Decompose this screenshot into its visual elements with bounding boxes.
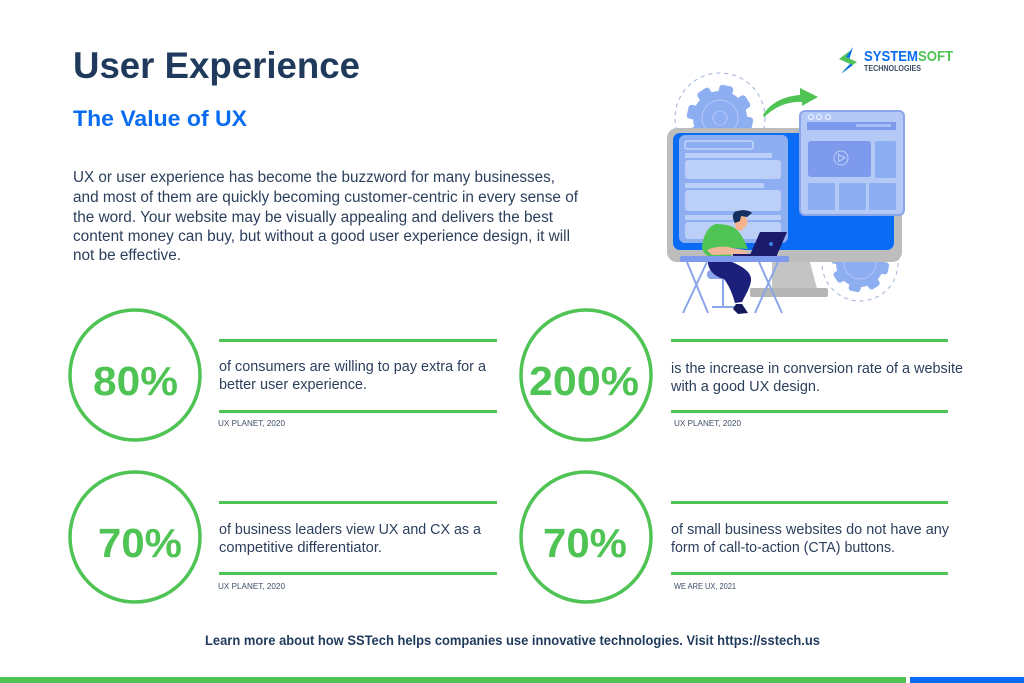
stat: 80% [70, 310, 497, 440]
arm [707, 247, 748, 255]
hair [733, 210, 752, 223]
source: UX PLANET, 2020 [218, 581, 285, 591]
intro paragraph: the word. Your website may be visually appealing and delivers the best [73, 209, 554, 226]
footer call to action: Learn more about how SSTech helps companies use innovative technologies. Visit https://sstech.us [205, 633, 820, 648]
icon: lower gear [822, 225, 898, 301]
intro paragraph: UX or user experience has become the buzzword for many businesses, [73, 169, 555, 186]
stool [707, 270, 735, 307]
title: User Experience [73, 44, 360, 86]
stat: 70% business leaders [70, 472, 497, 602]
logo wordmark: SYSTEMSOFT [864, 48, 953, 65]
torso [702, 224, 748, 256]
stat text [219, 359, 487, 393]
person with laptop at desk [680, 210, 789, 314]
subtitle: The Value of UX [73, 106, 247, 131]
top rule [219, 339, 497, 342]
stat number: 70% [98, 520, 182, 566]
source: UX PLANET, 2020 [218, 418, 285, 428]
bottom rule [671, 410, 948, 413]
legs [708, 262, 751, 303]
stat text: competitive differentiator. [219, 540, 382, 556]
bottom rule [219, 410, 497, 413]
arrow: green curved arrow [763, 88, 818, 117]
logo: SystemSoft Technologies [839, 47, 953, 74]
stat: 70% small business [521, 472, 950, 602]
stat number: 70% [543, 520, 627, 566]
stat text [671, 522, 950, 556]
monitor [667, 128, 902, 262]
laptop [750, 232, 787, 255]
footer bar: blue [910, 677, 1024, 683]
stat: 200% [521, 310, 963, 440]
intro paragraph: not be effective. [73, 247, 181, 264]
desk legs [683, 262, 782, 313]
source: WE ARE UX, 2021 [674, 581, 736, 591]
illustration: user at desk in front of monitor [667, 73, 904, 314]
source: UX PLANET, 2020 [674, 418, 741, 428]
stat number: 80% [93, 358, 178, 404]
head [734, 216, 748, 228]
stat circle [70, 472, 200, 602]
stat text: form of call-to-action (CTA) buttons. [671, 540, 895, 556]
stat text: better user experience. [219, 377, 367, 393]
intro paragraph [73, 169, 579, 264]
logo tagline: TECHNOLOGIES [864, 64, 922, 73]
icon: upper gear [675, 73, 765, 163]
stat text: of small business websites do not have any [671, 522, 950, 538]
stat circle [521, 472, 651, 602]
stat text: of business leaders view UX and CX as a [219, 522, 482, 538]
intro paragraph: content money can buy, but without a good user experience design, it will [73, 228, 570, 245]
stat text: with a good UX design. [670, 379, 820, 395]
stat number: 200% [529, 358, 639, 404]
icon: logo bolt [839, 47, 857, 74]
stat circle [521, 310, 651, 440]
stat text: of consumers are willing to pay extra for a [219, 359, 487, 375]
stat text [219, 522, 482, 556]
shoe [733, 304, 748, 314]
stat circle [70, 310, 200, 440]
top rule [671, 501, 948, 504]
sleeve [704, 238, 733, 248]
top rule [671, 339, 948, 342]
stat text [670, 361, 963, 395]
left content panel [679, 135, 788, 243]
intro paragraph: and most of them are quickly becoming customer-centric in every sense of [73, 189, 579, 206]
top rule [219, 501, 497, 504]
bottom rule [671, 572, 948, 575]
desk [680, 256, 789, 262]
footer bar: green [0, 677, 906, 683]
browser window [800, 111, 904, 215]
stat text: is the increase in conversion rate of a website [671, 361, 963, 377]
bottom rule [219, 572, 497, 575]
monitor stand [750, 262, 828, 297]
